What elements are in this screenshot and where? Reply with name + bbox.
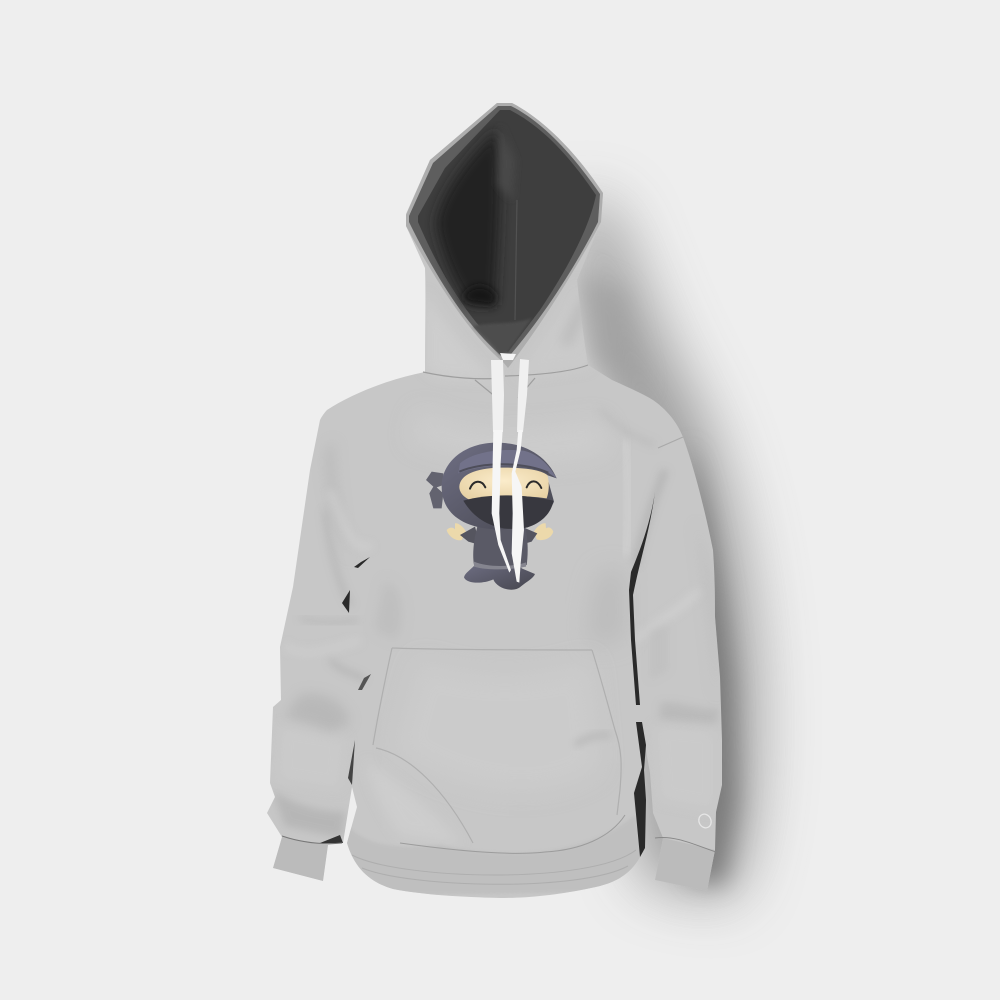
hood interior <box>406 103 603 368</box>
right sleeve folds <box>636 470 665 565</box>
cast shadow <box>565 200 757 900</box>
ninja: back knot <box>426 472 443 508</box>
ninja: drawstrings over print <box>492 430 524 583</box>
dark gaps between sleeves and torso <box>320 492 655 857</box>
ninja: mask <box>463 495 553 529</box>
waistband and cuff ribbing <box>282 815 716 884</box>
ninja: head <box>442 443 557 529</box>
cuffs <box>273 837 328 881</box>
kangaroo pocket <box>373 648 621 843</box>
hoodie body <box>267 103 722 898</box>
hoodie mockup illustration <box>267 103 794 928</box>
ninja: belt <box>474 562 526 569</box>
cloth shading <box>272 280 722 895</box>
sleeve logo <box>697 812 713 830</box>
ninja: legs <box>464 562 535 590</box>
hood seams <box>423 365 588 398</box>
upper drawstrings <box>491 359 529 432</box>
ninja: hands <box>447 523 553 540</box>
ninja: eyes <box>470 481 541 489</box>
torso shading <box>375 580 401 640</box>
ninja: face <box>459 468 549 501</box>
waistband <box>347 831 638 894</box>
ninja: torso <box>473 523 528 569</box>
ninja mascot <box>426 430 557 590</box>
ninja: arms <box>460 527 480 545</box>
left sleeve folds <box>325 440 350 565</box>
